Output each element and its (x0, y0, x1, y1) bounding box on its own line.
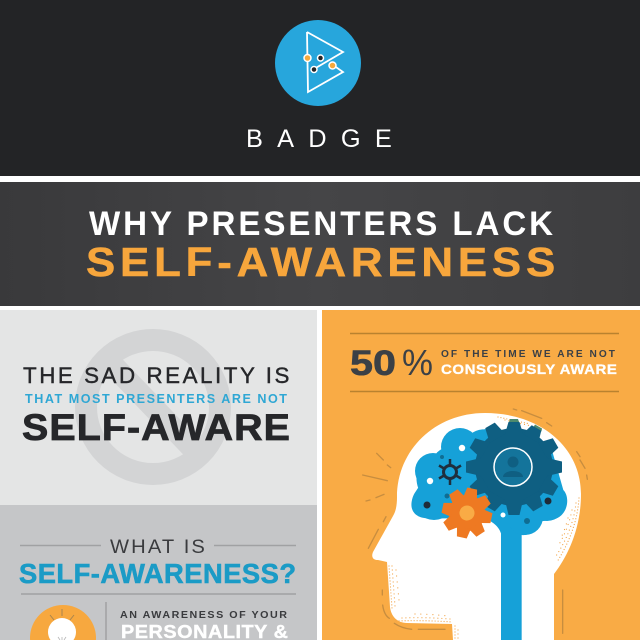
small dark gear (439, 459, 461, 485)
heading: the sad reality is: THE SAD REALITY IS (23, 363, 292, 388)
panel: the sad reality (0, 310, 317, 505)
heading: self-aware: SELF-AWARE (22, 407, 291, 448)
brain dots (424, 445, 552, 524)
icon: person (494, 448, 532, 486)
panel: what is self-awareness (0, 505, 317, 640)
panel: fifty percent (322, 310, 640, 640)
large gear (466, 419, 562, 515)
title line one: WHY PRESENTERS LACK (89, 205, 556, 243)
brand name: BADGE (246, 125, 406, 153)
statistic: 50 percent: 50 (350, 344, 396, 383)
head silhouette (372, 413, 581, 640)
orange gear (442, 488, 492, 538)
green gear tips (509, 419, 542, 432)
text: of the time: OF THE TIME WE ARE NOT (441, 349, 617, 360)
heading: what is: WHAT IS (110, 537, 207, 558)
text: awareness of your: AN AWARENESS OF YOUR (120, 609, 288, 621)
head shading speckles (389, 417, 579, 640)
dashes around head (363, 409, 587, 633)
subheading: most presenters: THAT MOST PRESENTERS ARE NOT (25, 392, 288, 406)
icon: prohibition watermark (86, 340, 220, 474)
statistic: 50 percent: % (402, 342, 433, 383)
illustration: head with gears (363, 409, 587, 640)
icon: badge logo (275, 20, 361, 106)
heading: self-awareness question: SELF-AWARENESS? (19, 558, 296, 589)
title band (0, 182, 640, 306)
title line two: SELF-AWARENESS (86, 239, 560, 285)
brain (411, 428, 567, 640)
header band with logo (0, 0, 640, 176)
statistic: 50 percent (350, 350, 432, 376)
icon: light bulb (30, 605, 96, 640)
text: consciously aware: CONSCIOUSLY AWARE (441, 361, 618, 377)
